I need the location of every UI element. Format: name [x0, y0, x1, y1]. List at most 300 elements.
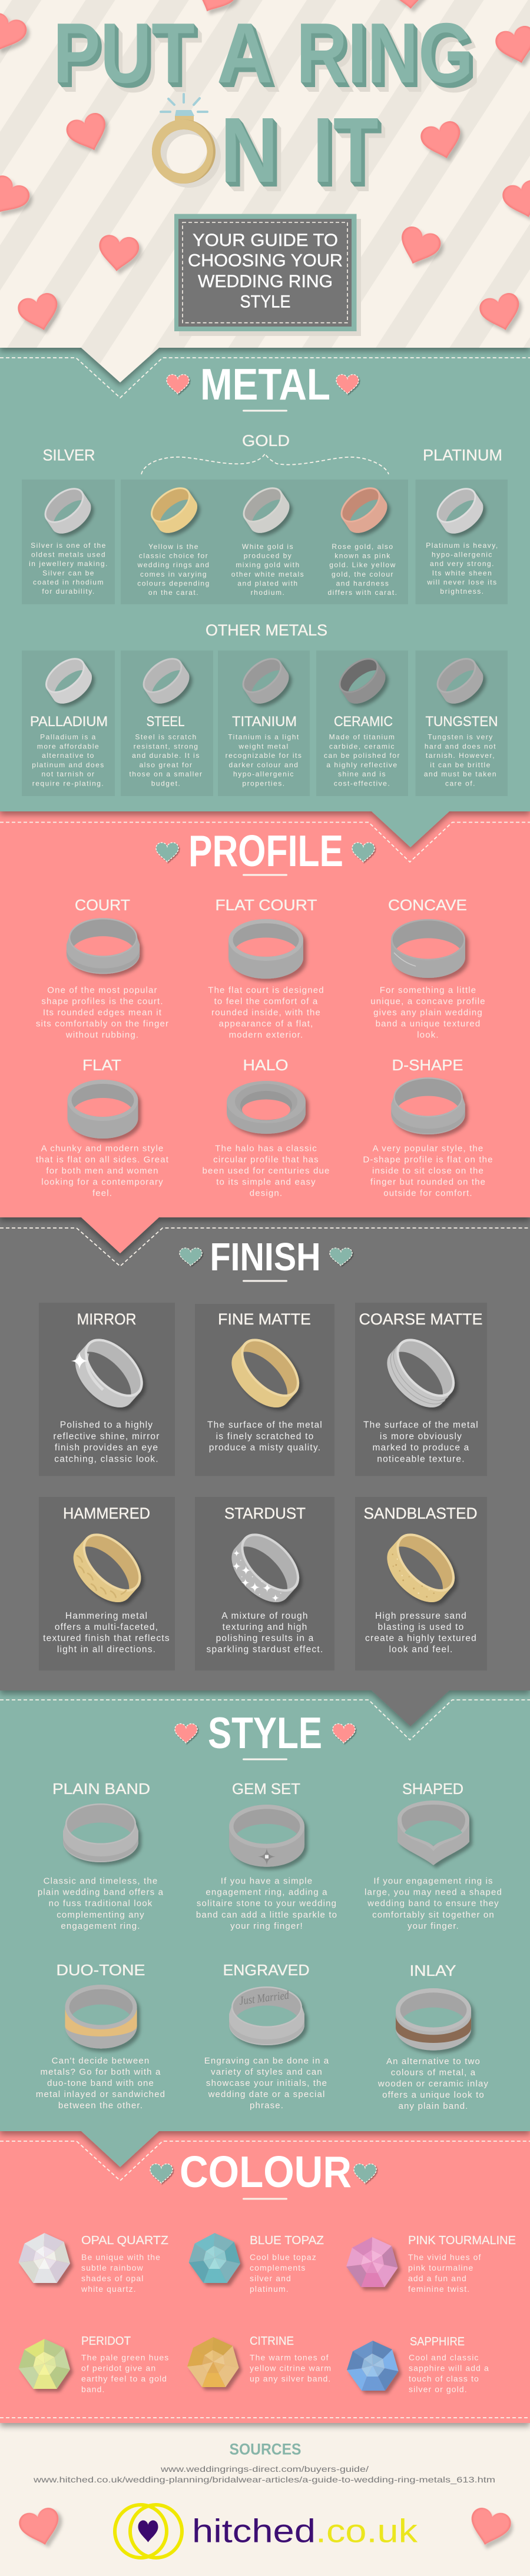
panel: stardust: A mixture of rough	[221, 1611, 309, 1621]
text: white gold: and plated with	[237, 579, 299, 587]
item: d-shape: inside to sit close on the	[372, 1166, 484, 1176]
icon: peridot gem	[19, 2339, 70, 2389]
panel: steel: resistant, strong	[134, 742, 198, 750]
panel: profile section	[0, 806, 530, 1253]
panel: sandblasted: blasting is used to	[378, 1622, 464, 1632]
icon: halo ring	[227, 1081, 306, 1134]
icon: yellow gold ring	[144, 481, 204, 540]
panel: titanium: properties.	[242, 779, 286, 787]
item: gem set: band can add a little sparkle to	[196, 1910, 337, 1920]
panel: sandblasted: High pressure sand	[375, 1611, 467, 1621]
text: white gold: produced by	[244, 552, 292, 560]
callout: subtitle box: WEDDING RING	[198, 272, 333, 291]
panel: ceramic: shine and is	[338, 770, 386, 778]
panel: stardust	[195, 1497, 334, 1670]
item: flat court: to feel the comfort of a	[214, 997, 318, 1006]
logo: hitched.co.uk: hitched	[192, 2512, 316, 2549]
title: put a ring	[53, 5, 477, 202]
panel: hammered	[39, 1497, 175, 1670]
icon: heading heart left	[175, 1724, 197, 1743]
text: blue topaz: Cool blue topaz	[250, 2252, 317, 2262]
item: court: COURT	[75, 896, 130, 914]
panel: sandblasted: create a highly textured	[365, 1633, 477, 1643]
item: duo-tone: Can't decide between	[52, 2056, 150, 2066]
panel: titanium: Titanium is a light	[228, 733, 300, 741]
text: source links: www.weddingrings-direct.com/buyers-guide/	[160, 2464, 369, 2474]
icon: flat ring	[67, 1080, 138, 1139]
item: plain band: Classic and timeless, the	[44, 1876, 158, 1886]
panel: gold types	[121, 480, 408, 604]
icon: heading heart left	[180, 1248, 202, 1266]
panel: ceramic: cost-effective.	[334, 779, 390, 787]
panel: ceramic: Made of titanium	[329, 733, 395, 741]
panel: platinum	[416, 446, 508, 604]
text: blue topaz: complements	[250, 2263, 306, 2272]
panel: stardust: texturing and high	[223, 1622, 307, 1632]
icon: plain band ring	[63, 1803, 138, 1862]
item: inlay: any plain band.	[398, 2101, 469, 2111]
item: court	[36, 896, 169, 1040]
text: rose gold: gold. Like yellow	[329, 561, 396, 569]
item: engraved	[204, 1961, 329, 2111]
panel: coarse matte: The surface of the metal	[363, 1420, 479, 1430]
item: plain band	[38, 1780, 164, 1931]
panel: hammered: textured finish that reflects	[43, 1633, 170, 1643]
item: halo: been used for centuries due	[202, 1166, 330, 1176]
item: inlay: INLAY	[410, 1962, 456, 1979]
text: pink tourmaline: PINK TOURMALINE	[408, 2234, 516, 2247]
item: inlay: offers a unique look to	[382, 2090, 485, 2100]
text: pink tourmaline: pink tourmaline	[408, 2263, 473, 2272]
text: opal quartz: shades of opal	[81, 2274, 144, 2283]
panel: mirror	[39, 1303, 175, 1476]
panel: stardust: polishing results in a	[216, 1633, 314, 1643]
item: concave	[370, 896, 486, 1040]
panel: platinum: Platinum is heavy,	[426, 541, 499, 550]
item: flat: FLAT	[82, 1056, 121, 1074]
item: gem set: GEM SET	[232, 1780, 300, 1798]
icon: footer heart left	[16, 2505, 65, 2550]
icon: heading heart left	[167, 374, 189, 394]
icon: opal quartz gem	[19, 2233, 70, 2283]
panel: hammered: offers a multi-faceted,	[55, 1622, 158, 1632]
panel: footer background	[0, 2412, 530, 2576]
panel: coarse matte: is more obviously	[380, 1432, 462, 1442]
item: flat court: appearance of a flat,	[219, 1019, 313, 1029]
heading: profile: PROFILE	[188, 826, 343, 876]
icon: heading heart right	[336, 374, 359, 394]
item: duo-tone: metal inlayed or sandwiched	[36, 2089, 165, 2099]
item: flat: looking for a contemporary	[41, 1177, 164, 1187]
panel: hammered: Hammering metal	[65, 1611, 148, 1621]
text: peridot	[81, 2335, 169, 2394]
panel: steel: budget.	[151, 779, 181, 787]
icon: pink tourmaline gem	[346, 2237, 398, 2287]
text: sapphire: SAPPHIRE	[410, 2335, 465, 2348]
panel: steel: those on a smaller	[129, 770, 203, 778]
panel: footer sources and logo	[16, 2441, 514, 2558]
icon: d-shape ring	[391, 1077, 465, 1134]
panel: ceramic: a highly reflective	[326, 761, 398, 769]
text: peridot: The pale green hues	[81, 2352, 169, 2362]
panel: palladium: alternative to	[42, 751, 95, 760]
text: rose gold: Rose gold, also	[332, 543, 394, 551]
item: court: without rubbing.	[65, 1030, 139, 1040]
panel: titanium: darker colour and	[229, 761, 299, 769]
item: flat court: The flat court is designed	[208, 985, 324, 996]
panel: fine matte: FINE MATTE	[218, 1310, 311, 1328]
text: white gold: White gold is	[242, 543, 294, 551]
item: plain band: plain wedding band offers a	[38, 1888, 164, 1898]
item: plain band: complementing any	[57, 1910, 145, 1920]
text: white gold: mixing gold with	[236, 561, 300, 569]
item: inlay	[377, 1962, 489, 2111]
panel: tungsten: Tungsten is very	[428, 733, 493, 741]
item: plain band: PLAIN BAND	[52, 1780, 150, 1798]
panel: silver: oldest metals used	[31, 551, 106, 559]
icon: sandblasted ring	[376, 1523, 466, 1613]
item: shaped: If your engagement ring is	[373, 1876, 493, 1886]
panel: ceramic	[316, 651, 408, 796]
panel: palladium: require re-plating.	[32, 779, 104, 787]
item: court: One of the most popular	[47, 985, 158, 996]
item: engraved: wedding date or a special	[208, 2089, 325, 2099]
panel: stardust: sparkling stardust effect.	[207, 1645, 323, 1655]
item: flat court: FLAT COURT	[216, 896, 317, 914]
heading: style: STYLE	[208, 1708, 322, 1758]
icon: sapphire gem	[347, 2341, 398, 2391]
panel: stardust: STARDUST	[224, 1505, 306, 1522]
panel: palladium	[22, 651, 115, 796]
icon: hearts	[0, 0, 530, 335]
text: source links	[33, 2464, 495, 2484]
item: flat court	[208, 896, 324, 1040]
item: d-shape	[363, 1056, 493, 1198]
panel: palladium: Palladium is a	[40, 733, 97, 741]
item: shaped: large, you may need a shaped	[365, 1888, 502, 1898]
icon: inlay ring	[396, 1988, 471, 2051]
panel: palladium: more affordable	[37, 742, 100, 750]
icon: engraved ring	[229, 1986, 304, 2045]
text: citrine	[250, 2335, 332, 2383]
item: court: Its rounded edges mean it	[43, 1007, 162, 1018]
item: concave: look.	[417, 1030, 439, 1040]
panel: ceramic: CERAMIC	[334, 714, 393, 730]
text: sapphire: Cool and classic	[409, 2352, 479, 2362]
text: rose gold: differs with carat.	[328, 588, 398, 597]
item: halo	[202, 1056, 330, 1198]
text: blue topaz	[250, 2234, 324, 2294]
panel: sandblasted: SANDBLASTED	[364, 1505, 477, 1522]
item: halo: to its simple and easy	[216, 1177, 316, 1187]
panel: sandblasted: look and feel.	[389, 1645, 453, 1655]
panel: titanium: TITANIUM	[232, 714, 297, 730]
icon: hammered ring	[62, 1523, 152, 1613]
item: d-shape: finger but rounded on the	[370, 1177, 486, 1187]
icon: heading heart left	[156, 843, 178, 862]
item: flat: for both men and women	[46, 1166, 159, 1176]
text: rose gold: known as pink	[334, 552, 391, 560]
icon: citrine gem	[187, 2337, 239, 2387]
label: gold: GOLD	[242, 432, 290, 450]
panel: platinum: PLATINUM	[423, 446, 502, 464]
panel: titanium: weight metal	[238, 742, 289, 750]
icon: fine matte ring	[221, 1329, 310, 1418]
icon: flat court ring	[228, 919, 303, 979]
item: d-shape: A very popular style, the	[373, 1144, 483, 1153]
item: engraved: variety of styles and can	[211, 2067, 323, 2077]
icon: silver ring	[37, 481, 98, 541]
text: citrine: up any silver band.	[250, 2374, 331, 2383]
item: concave: CONCAVE	[388, 896, 467, 914]
text: white gold: other white metals	[231, 570, 304, 578]
item: halo: circular profile that has	[213, 1154, 319, 1165]
text: pink tourmaline: feminine twist.	[408, 2284, 470, 2294]
text: peridot: earthy feel to a gold	[81, 2374, 167, 2383]
text: pink tourmaline	[408, 2234, 516, 2294]
text: citrine: The warm tones of	[250, 2352, 329, 2362]
text: yellow gold: colours depending	[137, 579, 210, 587]
item: engraved: Engraving can be done in a	[204, 2056, 329, 2066]
text: opal quartz: subtle rainbow	[81, 2263, 144, 2272]
item: concave: unique, a concave profile	[370, 997, 486, 1006]
logo: hitched.co.uk	[115, 2505, 418, 2558]
panel: platinum: Its white sheen	[432, 569, 492, 577]
item: gem set	[196, 1780, 337, 1931]
item: shaped: comfortably sit together on	[372, 1910, 495, 1920]
item: duo-tone: duo-tone band with one	[47, 2078, 154, 2088]
item: court: shape profiles is the court.	[41, 997, 164, 1006]
title: put a ring: RING	[296, 5, 473, 101]
item: flat court: modern exterior.	[229, 1030, 303, 1040]
text: white gold: rhodium.	[251, 588, 285, 597]
panel: fine matte: is finely scratched to	[216, 1432, 314, 1442]
text: yellow gold: comes in varying	[140, 570, 207, 578]
heading: colour: COLOUR	[180, 2147, 352, 2196]
text: blue topaz: BLUE TOPAZ	[250, 2234, 324, 2247]
item: engraved: phrase.	[250, 2101, 284, 2111]
icon: court ring	[67, 918, 140, 974]
item: plain band: engagement ring.	[61, 1921, 141, 1931]
text: sapphire	[409, 2335, 489, 2394]
panel: tungsten: hard and does not	[425, 742, 496, 750]
item: duo-tone	[36, 1961, 165, 2111]
panel: header	[0, 0, 530, 382]
icon: heading heart right	[352, 843, 375, 862]
text: rose gold: and hardness	[336, 579, 389, 587]
panel: silver: coated in rhodium	[33, 578, 104, 586]
panel: steel: Steel is scratch	[135, 733, 197, 741]
item: flat: feel.	[92, 1189, 112, 1198]
text: pink tourmaline: add a fun and	[408, 2274, 467, 2283]
panel: mirror: finish provides an eye	[55, 1443, 158, 1453]
text: citrine: CITRINE	[250, 2335, 294, 2348]
item: halo: The halo has a classic	[215, 1144, 317, 1153]
panel: silver: for durability.	[42, 587, 95, 595]
item: gem set: your ring finger!	[230, 1921, 303, 1931]
callout: subtitle box: YOUR GUIDE TO	[193, 231, 338, 250]
callout: subtitle box: STYLE	[240, 292, 291, 312]
icon: blue topaz gem	[188, 2233, 240, 2283]
panel: silver: SILVER	[42, 446, 95, 464]
panel: metal section	[0, 344, 530, 847]
panel: platinum: will never lose its	[426, 578, 498, 586]
icon: platinum ring	[429, 481, 491, 541]
heading: sources: SOURCES	[230, 2441, 302, 2458]
item: concave: For something a little	[380, 985, 476, 996]
item: inlay: wooden or ceramic inlay	[377, 2079, 489, 2089]
heading: other metals: OTHER METALS	[206, 621, 327, 639]
text: citrine: yellow citrine warm	[250, 2363, 332, 2372]
item: inlay: colours of metal, a	[391, 2068, 476, 2078]
icon: gem set ring	[229, 1805, 304, 1867]
panel: fine matte	[195, 1304, 334, 1476]
icon: white gold ring	[236, 481, 297, 540]
item: gem set: engagement ring, adding a	[206, 1888, 328, 1898]
callout: subtitle box: CHOOSING YOUR	[188, 251, 343, 271]
panel: hammered: HAMMERED	[63, 1505, 150, 1522]
panel: tungsten: TUNGSTEN	[425, 714, 498, 730]
item: concave: gives any plain wedding	[373, 1007, 483, 1018]
icon: coarse matte ring	[376, 1329, 466, 1418]
title: put a ring: IT	[313, 99, 379, 202]
panel: fine matte: The surface of the metal	[207, 1420, 323, 1430]
panel: sandblasted	[355, 1497, 487, 1670]
item: plain band: no fuss traditional look	[49, 1899, 153, 1909]
item: duo-tone: metals? Go for both with a	[40, 2067, 161, 2077]
item: d-shape: outside for comfort.	[383, 1189, 473, 1198]
item: shaped: your finger.	[408, 1921, 459, 1931]
text: sapphire: sapphire will add a	[409, 2363, 489, 2372]
icon: stardust ring	[221, 1523, 310, 1613]
panel: tungsten: tarnish. However,	[426, 751, 495, 760]
panel: fine matte: produce a misty quality.	[209, 1443, 321, 1453]
item: gem set: solitaire stone to your wedding	[197, 1899, 337, 1909]
panel: style section	[0, 1683, 530, 2167]
text: opal quartz: OPAL QUARTZ	[81, 2234, 168, 2247]
panel: steel: STEEL	[146, 714, 185, 730]
heading: finish: FINISH	[210, 1235, 320, 1279]
panel: coarse matte: noticeable texture.	[377, 1454, 465, 1464]
panel: steel: also great for	[139, 761, 193, 769]
text: pink tourmaline: The vivid hues of	[408, 2252, 482, 2262]
title: put a ring: PUT	[53, 5, 195, 101]
item: court: sits comfortably on the finger	[36, 1019, 169, 1029]
panel: mirror: catching, classic look.	[54, 1454, 159, 1464]
panel: colour section	[0, 2124, 530, 2423]
panel: coarse matte: marked to produce a	[373, 1443, 469, 1453]
callout: subtitle box	[174, 214, 361, 336]
item: shaped	[365, 1780, 502, 1931]
icon: heading heart right	[354, 2164, 376, 2183]
text: yellow gold: on the carat.	[148, 588, 199, 597]
text: sapphire: silver or gold.	[409, 2384, 468, 2394]
item: duo-tone: between the other.	[58, 2101, 143, 2111]
icon: duo-tone ring	[65, 1985, 137, 2049]
item: gem set: If you have a simple	[221, 1876, 313, 1886]
panel: platinum: hypo-allergenic	[432, 551, 493, 559]
text: rose gold: gold, the colour	[332, 570, 394, 578]
panel: silver: Silver can be	[42, 569, 95, 577]
text: peridot: PERIDOT	[81, 2335, 131, 2348]
item: engraved: showcase your initials, the	[206, 2078, 327, 2088]
panel: silver	[22, 446, 115, 604]
panel: tungsten: it can be brittle	[430, 761, 491, 769]
icon: gold ring letter O	[152, 94, 221, 188]
connector: gold brace	[141, 454, 389, 474]
item: d-shape: D-SHAPE	[392, 1056, 463, 1074]
text: opal quartz: Be unique with the	[81, 2252, 161, 2262]
panel: tungsten: care of.	[445, 779, 476, 787]
icon: mirror ring	[64, 1329, 154, 1418]
panel: tungsten	[416, 651, 508, 796]
item: shaped: SHAPED	[402, 1780, 463, 1798]
text: peridot: of peridot give an	[81, 2363, 156, 2372]
panel: palladium: platinum and does	[32, 761, 105, 769]
panel: ceramic: can be polished for	[324, 751, 400, 760]
panel: hammered: light in all directions.	[57, 1645, 156, 1655]
panel: titanium: hypo-allergenic	[233, 770, 294, 778]
panel: mirror: Polished to a highly	[60, 1420, 153, 1430]
panel: palladium: not tarnish or	[41, 770, 95, 778]
text: peridot: band.	[81, 2384, 105, 2394]
icon: concave ring	[391, 919, 465, 978]
panel: coarse matte	[355, 1303, 487, 1476]
panel: silver: Silver is one of the	[31, 541, 107, 550]
item: flat: that is flat on all sides. Great	[36, 1154, 169, 1165]
item: duo-tone: DUO-TONE	[57, 1961, 145, 1979]
item: shaped: wedding band to ensure they	[367, 1899, 499, 1909]
icon: heading heart right	[333, 1724, 355, 1743]
panel: mirror: MIRROR	[77, 1310, 137, 1328]
panel: tungsten: and must be taken	[424, 770, 497, 778]
panel: palladium: PALLADIUM	[30, 714, 108, 730]
panel: steel	[121, 651, 213, 796]
text: source links: www.hitched.co.uk/wedding-planning/bridalwear-articles/a-guide-to-wedding-ring-metals_613.htm	[33, 2475, 495, 2484]
text: yellow gold: classic choice for	[139, 552, 208, 560]
item: d-shape: D-shape profile is flat on the	[363, 1154, 493, 1165]
icon: rose gold ring	[333, 481, 395, 540]
text: yellow gold: Yellow is the	[148, 543, 199, 551]
title: put a ring: N	[220, 99, 279, 202]
panel: finish section	[0, 1212, 530, 1726]
item: inlay: An alternative to two	[386, 2056, 481, 2066]
icon: shaped ring	[398, 1800, 469, 1865]
text: blue topaz: silver and	[250, 2274, 292, 2283]
panel: steel: and durable. It is	[132, 751, 200, 760]
panel: ceramic: carbide, ceramic	[329, 742, 395, 750]
panel: silver: in jewellery making.	[29, 560, 108, 568]
item: concave: band a unique textured	[376, 1019, 481, 1029]
title: put a ring: A	[217, 5, 273, 101]
text: blue topaz: platinum.	[250, 2284, 289, 2294]
panel: platinum: and very strong.	[430, 560, 495, 568]
item: flat	[36, 1056, 169, 1198]
icon: heading heart left	[150, 2164, 173, 2183]
panel: titanium: recognizable for its	[226, 751, 302, 760]
item: halo: design.	[250, 1189, 283, 1198]
panel: mirror: reflective shine, mirror	[53, 1432, 160, 1442]
icon: heading heart right	[330, 1248, 352, 1266]
text: yellow gold: wedding rings and	[137, 561, 210, 569]
panel: coarse matte: COARSE MATTE	[359, 1310, 483, 1328]
item: flat: A chunky and modern style	[41, 1144, 164, 1153]
icon: engraved ring: Just Married	[238, 1989, 290, 2008]
panel: platinum: brightness.	[440, 587, 485, 595]
item: flat court: rounded inside, with the	[211, 1007, 321, 1018]
logo: hitched.co.uk: .co.uk	[316, 2512, 418, 2549]
text: sapphire: touch of class to	[409, 2374, 479, 2383]
